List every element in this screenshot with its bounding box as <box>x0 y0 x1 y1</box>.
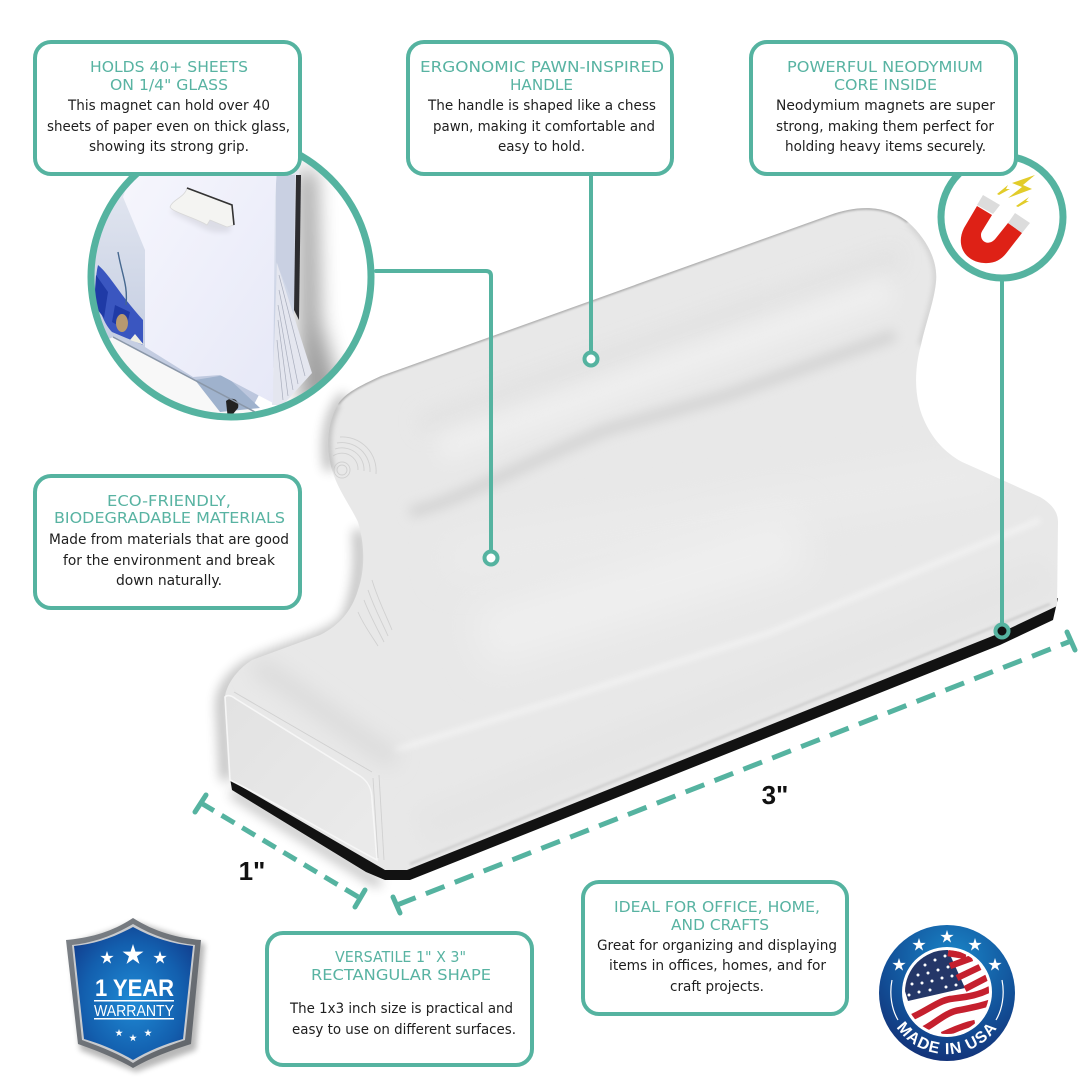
connector: photo circle to eco callout point <box>376 271 498 564</box>
warranty text: WARRANTY <box>94 1003 174 1020</box>
callout: versatile shape: The 1x3 inch size is practical and <box>289 1001 513 1017</box>
callout: versatile shape: RECTANGULAR SHAPE <box>311 966 491 984</box>
callout: ideal for office: AND CRAFTS <box>671 916 769 934</box>
callout: neodymium core: CORE INSIDE <box>834 76 937 94</box>
callout: holds 40+ sheets: This magnet can hold over 40 <box>67 98 270 114</box>
icon: red horseshoe magnet <box>961 195 1030 263</box>
magnet body <box>225 208 1058 870</box>
badge: 1 year warranty shield <box>66 918 205 1072</box>
dimension: 1 inch <box>195 795 365 907</box>
callout: holds 40+ sheets: sheets of paper even on thick glass, <box>47 119 290 135</box>
callout: eco-friendly: for the environment and break <box>63 553 276 569</box>
badge side arcs <box>891 980 1003 1020</box>
circle ring <box>91 137 371 417</box>
badge stars <box>892 930 1002 971</box>
callout: neodymium core: POWERFUL NEODYMIUM <box>787 58 983 76</box>
handle dot <box>584 352 598 366</box>
black magnetic base strip <box>230 598 1058 880</box>
object soft shadow <box>222 396 380 884</box>
dimension: 3 inch <box>393 632 1075 913</box>
callout: holds 40+ sheets: HOLDS 40+ SHEETS <box>90 58 248 76</box>
connector: handle callout <box>584 174 598 366</box>
1 inch label: 1" <box>239 856 265 886</box>
callout: versatile shape: VERSATILE 1" X 3" <box>335 948 466 966</box>
icon: lightning sparks <box>997 175 1035 207</box>
shield stars <box>100 944 167 1041</box>
magnet icon circle <box>941 156 1063 278</box>
ring <box>941 156 1063 278</box>
made in USA text: MADE IN USA <box>896 1021 997 1054</box>
photo scene <box>94 161 344 414</box>
callout: ergonomic handle: HANDLE <box>510 76 573 94</box>
callout: neodymium core: Neodymium magnets are super <box>776 98 995 114</box>
callout: ideal for office <box>583 882 847 1014</box>
shield silver trim <box>72 924 195 1063</box>
badge disc <box>879 925 1015 1061</box>
callout: eco-friendly: BIODEGRADABLE MATERIALS <box>54 509 285 527</box>
callout: ideal for office: IDEAL FOR OFFICE, HOME, <box>614 898 820 916</box>
shield blue <box>74 927 193 1060</box>
callout: ideal for office: craft projects. <box>670 979 764 995</box>
photo circle: magnet holding paper stack on glass <box>85 137 371 430</box>
badge: made in USA <box>879 925 1015 1061</box>
shield outer <box>66 918 201 1068</box>
layer ripple texture <box>234 437 392 860</box>
callout: ergonomic handle: The handle is shaped like a chess <box>427 98 656 114</box>
callout: versatile shape <box>267 933 532 1065</box>
product: white pawn-handle magnet <box>222 208 1058 884</box>
callout: eco-friendly: Made from materials that are good <box>49 532 289 548</box>
warranty text: 1 YEAR <box>95 975 174 1002</box>
callout: ergonomic handle: pawn, making it comfortable and <box>433 119 655 135</box>
body shading and highlights <box>255 208 1050 864</box>
callout: ergonomic handle: ERGONOMIC PAWN-INSPIRED <box>420 58 664 76</box>
connector: neodymium core <box>996 281 1008 638</box>
callout: eco-friendly: down naturally. <box>116 573 222 589</box>
callout: eco-friendly <box>35 476 300 608</box>
3 inch label: 3" <box>762 780 788 810</box>
circle background <box>91 137 371 417</box>
callout: holds 40+ sheets: showing its strong grip. <box>89 139 249 155</box>
callout: versatile shape: easy to use on different surfaces. <box>292 1022 516 1038</box>
callout: ideal for office: Great for organizing and displaying <box>597 938 837 954</box>
left end face <box>225 696 377 860</box>
badge white ring <box>902 947 992 1037</box>
callout: neodymium core: holding heavy items securely. <box>785 139 986 155</box>
callout: ideal for office: items in offices, homes, and for <box>609 958 826 974</box>
warranty text <box>94 975 174 1020</box>
callout: neodymium core <box>751 42 1016 174</box>
callout: holds 40+ sheets: ON 1/4" GLASS <box>110 76 228 94</box>
callout: holds 40+ sheets <box>35 42 300 174</box>
connector dot <box>484 552 498 564</box>
flag <box>905 950 989 1034</box>
core dot <box>996 624 1008 638</box>
callout: ergonomic handle: easy to hold. <box>498 139 585 155</box>
callout: neodymium core: strong, making them perfect for <box>776 119 994 135</box>
shield shadow <box>70 922 205 1072</box>
callout: ergonomic handle <box>408 42 672 174</box>
callout: eco-friendly: ECO-FRIENDLY, <box>107 492 231 510</box>
